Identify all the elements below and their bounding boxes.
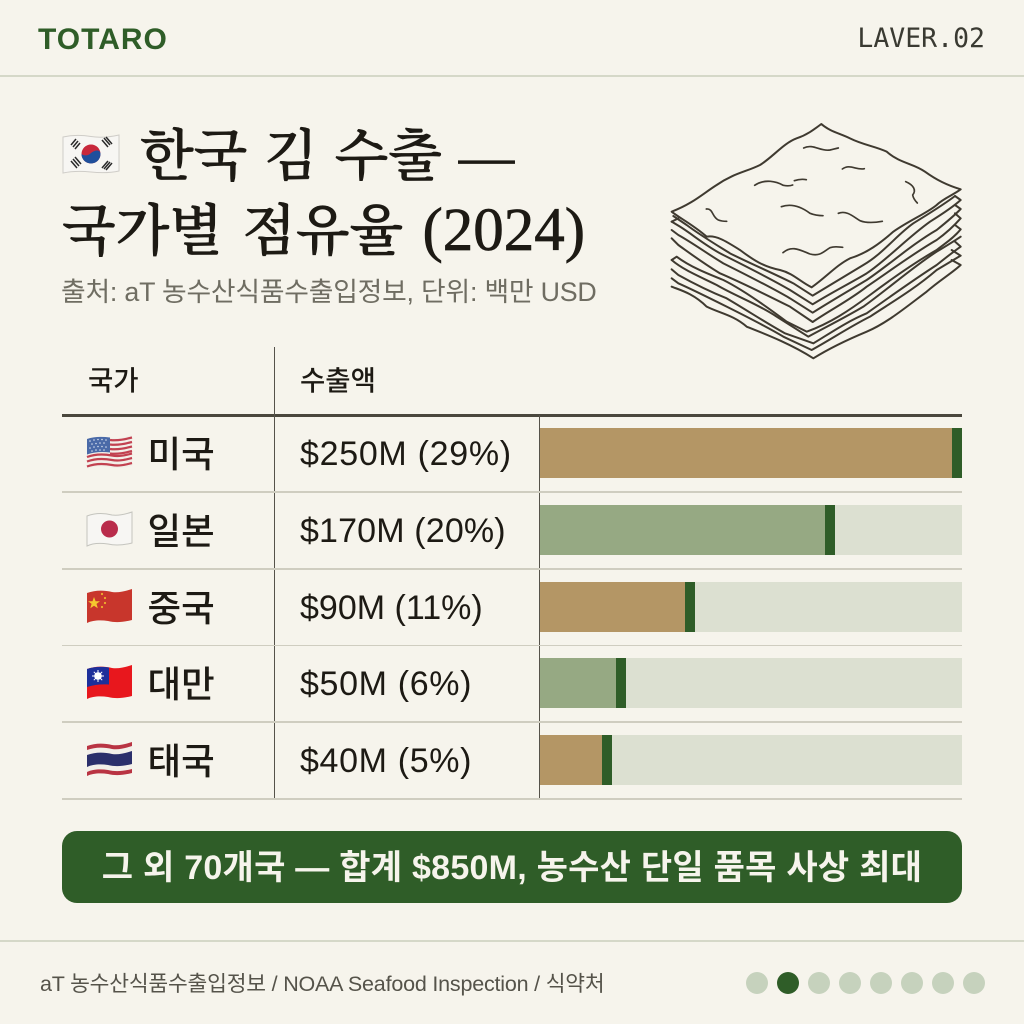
country: Japan: 일본 — [148, 511, 215, 552]
callout banner: 그 외 70개국 — 합계 $850M, 농수산 단일 품목 사상 최대 — [102, 849, 922, 887]
icon: Thailand flag — [87, 742, 132, 776]
country: China: 중국 — [148, 588, 215, 629]
table header: export value: 수출액 — [300, 365, 376, 396]
icon: South Korea flag — [62, 134, 120, 174]
bar: Japan — [540, 505, 962, 555]
country: United States: 미국 — [148, 434, 215, 475]
table — [88, 365, 376, 396]
icon: stacked laver sheets illustration — [670, 123, 962, 360]
value: United States: $250M (29%) — [300, 435, 512, 473]
pagination dots — [746, 972, 985, 994]
country: Taiwan: 대만 — [148, 664, 215, 705]
value: Japan: $170M (20%) — [300, 512, 506, 550]
bar: United States — [540, 428, 962, 478]
icon: US flag — [86, 436, 132, 468]
footer sources: aT 농수산식품수출입정보 / NOAA Seafood Inspection / 식약처 — [40, 972, 604, 996]
title: 국가별 점유율 (2024) — [62, 197, 585, 264]
icon: China flag — [87, 589, 132, 623]
icon: Taiwan flag — [87, 665, 132, 699]
header brand: TOTARO — [38, 23, 168, 56]
bar: Taiwan — [540, 658, 962, 708]
bar: China — [540, 582, 962, 632]
country: Thailand: 태국 — [148, 741, 215, 782]
icon: Japan flag — [86, 511, 132, 547]
value: Thailand: $40M (5%) — [300, 742, 472, 780]
callout banner — [62, 831, 962, 903]
table header: country: 국가 — [88, 365, 139, 396]
value: Taiwan: $50M (6%) — [300, 665, 472, 703]
value: China: $90M (11%) — [300, 589, 483, 627]
title — [62, 126, 585, 264]
header series label: LAVER.02 — [857, 23, 985, 54]
bar: Thailand — [540, 735, 962, 785]
title: 한국 김 수출 — — [140, 127, 514, 188]
subtitle: 출처: aT 농수산식품수출입정보, 단위: 백만 USD — [61, 277, 597, 307]
